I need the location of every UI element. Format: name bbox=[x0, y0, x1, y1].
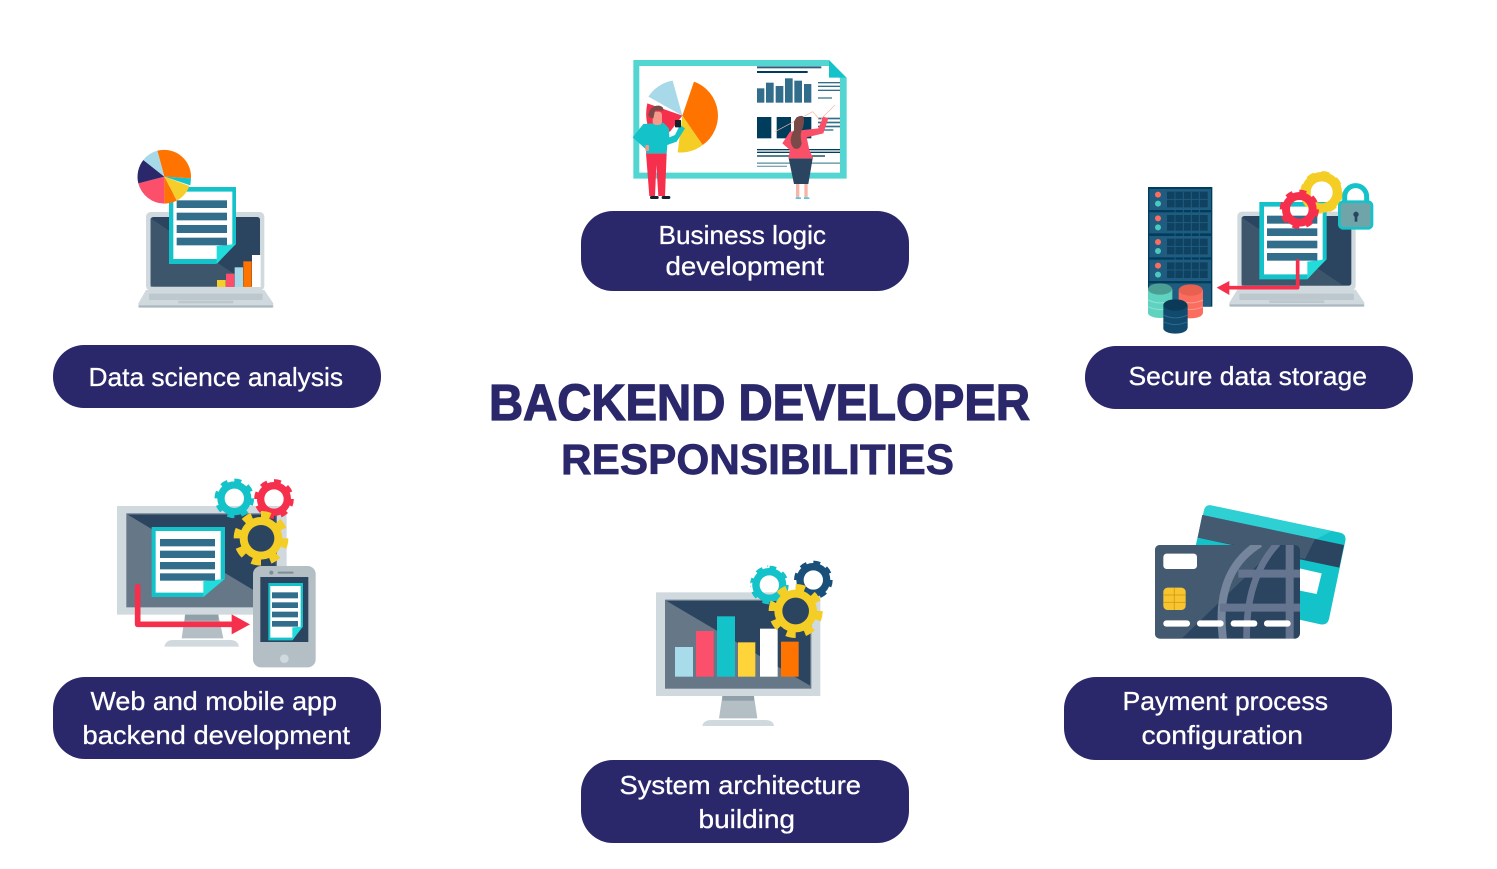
pill: payment process configuration: configuration bbox=[1142, 720, 1303, 750]
panel: secure data storage bbox=[1085, 174, 1413, 409]
icon: server, databases, laptop, gears and lock bbox=[1148, 174, 1372, 334]
icon: credit cards bbox=[1155, 505, 1346, 642]
pill: business logic development: development bbox=[666, 251, 825, 281]
pill: data science analysis bbox=[53, 345, 381, 408]
pill: web and mobile app backend development: backend development bbox=[82, 720, 351, 750]
pill: system architecture building: building bbox=[698, 804, 795, 834]
icon: presentation board with two people bbox=[633, 60, 847, 199]
pill: secure data storage bbox=[1085, 346, 1413, 409]
pill: business logic development: Business logic bbox=[658, 220, 826, 250]
panel: web and mobile app backend development bbox=[53, 481, 381, 759]
panel: system architecture building bbox=[581, 563, 909, 843]
title: RESPONSIBILITIES bbox=[561, 436, 954, 484]
panel: data science analysis bbox=[53, 150, 381, 408]
pill: system architecture building bbox=[581, 760, 909, 843]
pill: system architecture building: System architecture bbox=[620, 770, 861, 800]
title bbox=[489, 374, 1030, 484]
icon: monitor, phone, gears and arrow bbox=[117, 481, 316, 667]
pill: secure data storage: Secure data storage bbox=[1128, 361, 1367, 391]
pill: payment process configuration: Payment process bbox=[1122, 686, 1328, 716]
pill: data science analysis: Data science analysis bbox=[88, 362, 343, 392]
icon: laptop with pie chart and document bbox=[138, 150, 273, 308]
title: BACKEND DEVELOPER bbox=[489, 374, 1030, 431]
pill: payment process configuration bbox=[1064, 677, 1392, 760]
icon: monitor with bar chart and gears bbox=[656, 563, 830, 726]
pill: web and mobile app backend development: Web and mobile app bbox=[90, 686, 337, 716]
panel: business logic development bbox=[581, 60, 909, 291]
pill: business logic development bbox=[581, 211, 909, 291]
pill: web and mobile app backend development bbox=[53, 677, 381, 759]
panel: payment process configuration bbox=[1064, 505, 1392, 760]
